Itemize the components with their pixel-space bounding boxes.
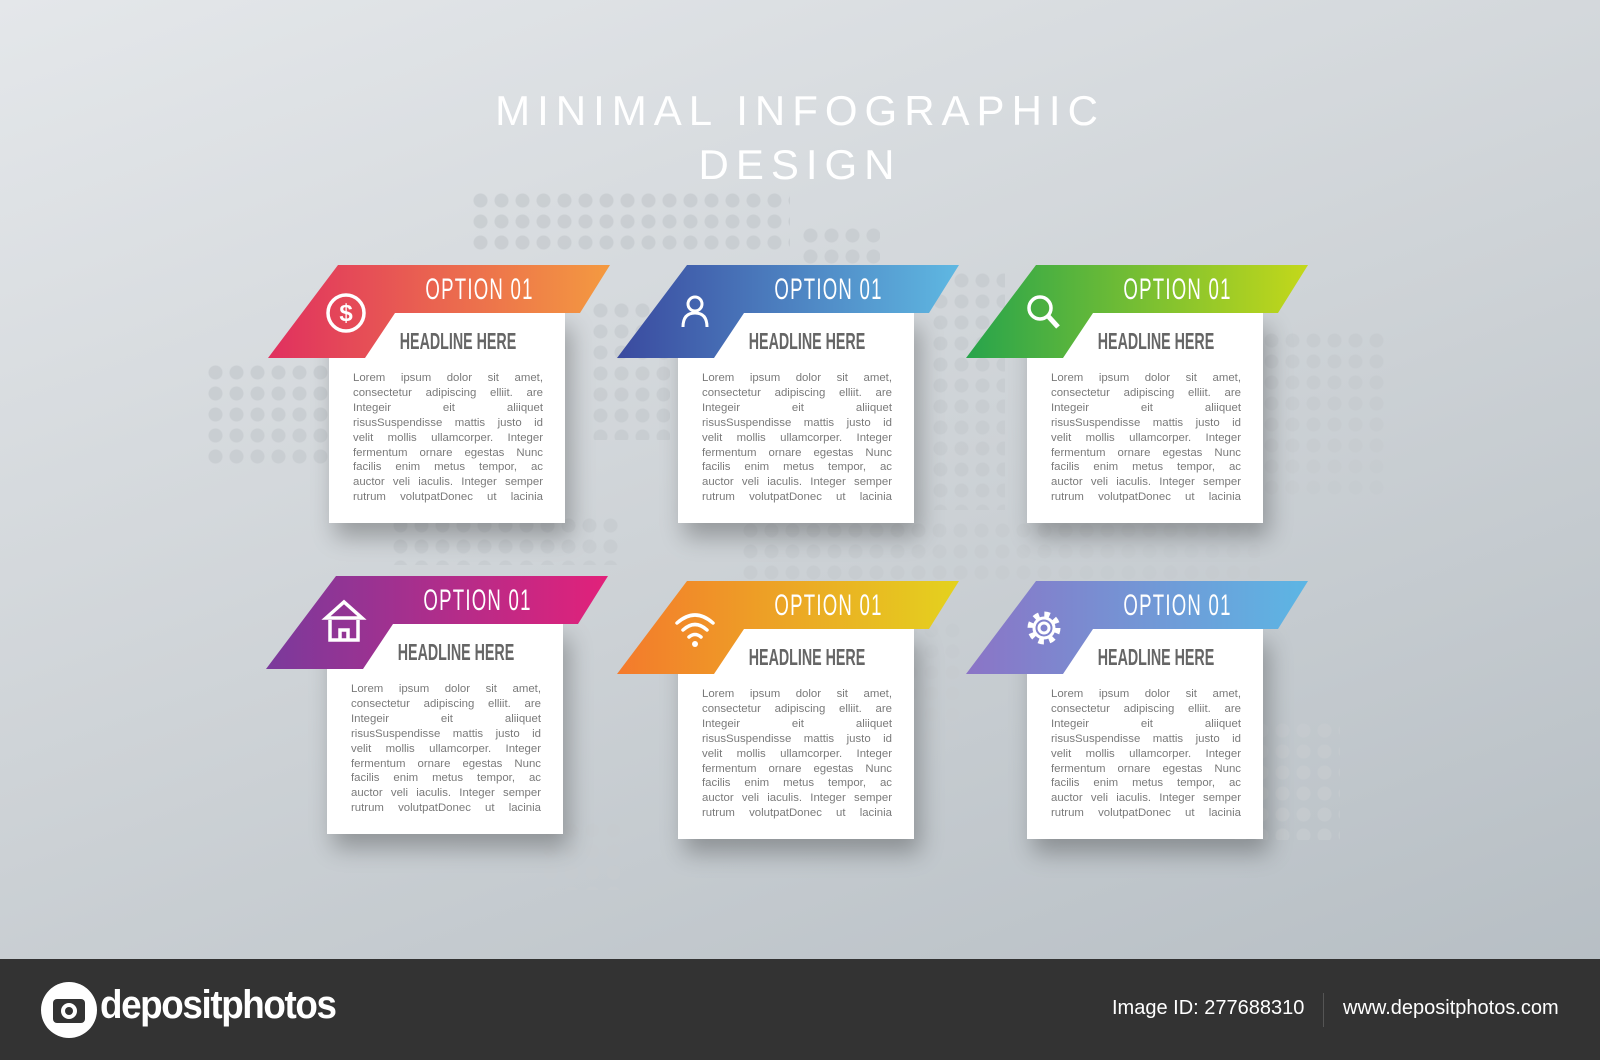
card 1: OPTION 01 xyxy=(425,273,534,306)
card 2: facilis enim metus tempor, ac xyxy=(702,461,892,473)
card 2: consectetur adipiscing elliit. are xyxy=(702,387,892,399)
card 6: OPTION 01 xyxy=(1123,589,1232,622)
banner 3 xyxy=(966,265,1308,358)
card 6: risusSuspendisse mattis justo id xyxy=(1051,733,1241,745)
card 6: velit mollis ullamcorper. Integer xyxy=(1051,748,1241,760)
card 6: Integeir eit aliiquet xyxy=(1051,718,1241,730)
card 6: rutrum volutpatDonec ut lacinia xyxy=(1051,807,1241,819)
card 3: Lorem ipsum dolor sit amet, xyxy=(1051,372,1241,384)
card 5: velit mollis ullamcorper. Integer xyxy=(702,748,892,760)
footer xyxy=(0,959,1600,1060)
card 4: OPTION 01 xyxy=(423,584,532,617)
card 2: HEADLINE HERE xyxy=(749,328,865,354)
card 1: Integeir eit aliiquet xyxy=(353,402,543,414)
card 6: HEADLINE HERE xyxy=(1098,644,1214,670)
title xyxy=(495,87,1105,188)
icon: person xyxy=(683,297,707,327)
card 6: fermentum ornare egestas Nunc xyxy=(1051,763,1241,775)
card 1: Lorem ipsum dolor sit amet, xyxy=(353,372,543,384)
card 3: velit mollis ullamcorper. Integer xyxy=(1051,432,1241,444)
card 4: consectetur adipiscing elliit. are xyxy=(351,698,541,710)
card 4: auctor veli iaculis. Integer semper xyxy=(351,787,541,799)
card 3: HEADLINE HERE xyxy=(1098,328,1214,354)
card 2: OPTION 01 xyxy=(774,273,883,306)
card 2: fermentum ornare egestas Nunc xyxy=(702,447,892,459)
card 3: facilis enim metus tempor, ac xyxy=(1051,461,1241,473)
card 5: Lorem ipsum dolor sit amet, xyxy=(702,688,892,700)
card 5: Integeir eit aliiquet xyxy=(702,718,892,730)
card 3: Integeir eit aliiquet xyxy=(1051,402,1241,414)
card 4: Lorem ipsum dolor sit amet, xyxy=(351,683,541,695)
image id: Image ID: 277688310 xyxy=(1112,997,1304,1019)
card 2: Integeir eit aliiquet xyxy=(702,402,892,414)
card 4: Integeir eit aliiquet xyxy=(351,713,541,725)
card 5: risusSuspendisse mattis justo id xyxy=(702,733,892,745)
card 6 xyxy=(966,581,1308,865)
card 1: fermentum ornare egestas Nunc xyxy=(353,447,543,459)
title: DESIGN xyxy=(698,141,902,188)
logo text: depositphotos xyxy=(100,983,336,1027)
card 5: consectetur adipiscing elliit. are xyxy=(702,703,892,715)
icon: house xyxy=(326,602,362,640)
card 3: OPTION 01 xyxy=(1123,273,1232,306)
card 5: facilis enim metus tempor, ac xyxy=(702,777,892,789)
card 1: consectetur adipiscing elliit. are xyxy=(353,387,543,399)
card 3: rutrum volutpatDonec ut lacinia xyxy=(1051,491,1241,503)
card 2: Lorem ipsum dolor sit amet, xyxy=(702,372,892,384)
card 2: risusSuspendisse mattis justo id xyxy=(702,417,892,429)
card 3: auctor veli iaculis. Integer semper xyxy=(1051,476,1241,488)
card 4: risusSuspendisse mattis justo id xyxy=(351,728,541,740)
card 3 xyxy=(966,265,1308,550)
card 1: auctor veli iaculis. Integer semper xyxy=(353,476,543,488)
card 4: fermentum ornare egestas Nunc xyxy=(351,758,541,770)
card 6: facilis enim metus tempor, ac xyxy=(1051,777,1241,789)
card 4: velit mollis ullamcorper. Integer xyxy=(351,743,541,755)
card 5 xyxy=(617,581,959,866)
card 1: HEADLINE HERE xyxy=(400,328,516,354)
banner 4 xyxy=(266,576,608,669)
banner 6 xyxy=(966,581,1308,674)
card 1 xyxy=(268,265,610,550)
card 6: Lorem ipsum dolor sit amet, xyxy=(1051,688,1241,700)
card 2: rutrum volutpatDonec ut lacinia xyxy=(702,491,892,503)
card 3: fermentum ornare egestas Nunc xyxy=(1051,447,1241,459)
card 3: risusSuspendisse mattis justo id xyxy=(1051,417,1241,429)
card 5: auctor veli iaculis. Integer semper xyxy=(702,792,892,804)
card 5: rutrum volutpatDonec ut lacinia xyxy=(702,807,892,819)
icon: camera logo xyxy=(41,982,97,1038)
banner 5 xyxy=(617,581,959,674)
banner 1: $ xyxy=(339,300,353,327)
icon: magnifier xyxy=(1029,297,1058,327)
website: www.depositphotos.com xyxy=(1343,997,1559,1019)
card 1: facilis enim metus tempor, ac xyxy=(353,461,543,473)
card 4: rutrum volutpatDonec ut lacinia xyxy=(351,802,541,814)
banner 1 xyxy=(268,265,610,358)
card 4: facilis enim metus tempor, ac xyxy=(351,772,541,784)
card 5: fermentum ornare egestas Nunc xyxy=(702,763,892,775)
card 4: HEADLINE HERE xyxy=(398,639,514,665)
card 5: OPTION 01 xyxy=(774,589,883,622)
icon: wifi xyxy=(677,615,713,637)
card 1: risusSuspendisse mattis justo id xyxy=(353,417,543,429)
card 4 xyxy=(266,576,608,860)
card 3: consectetur adipiscing elliit. are xyxy=(1051,387,1241,399)
card 6: consectetur adipiscing elliit. are xyxy=(1051,703,1241,715)
card 1: rutrum volutpatDonec ut lacinia xyxy=(353,491,543,503)
card 6: auctor veli iaculis. Integer semper xyxy=(1051,792,1241,804)
title: MINIMAL INFOGRAPHIC xyxy=(495,87,1105,134)
card 2 xyxy=(617,265,959,550)
card 1: velit mollis ullamcorper. Integer xyxy=(353,432,543,444)
card 5: HEADLINE HERE xyxy=(749,644,865,670)
banner 2 xyxy=(617,265,959,358)
icon: dollar xyxy=(328,295,364,331)
card 2: velit mollis ullamcorper. Integer xyxy=(702,432,892,444)
card 2: auctor veli iaculis. Integer semper xyxy=(702,476,892,488)
icon: gear xyxy=(1031,615,1057,641)
